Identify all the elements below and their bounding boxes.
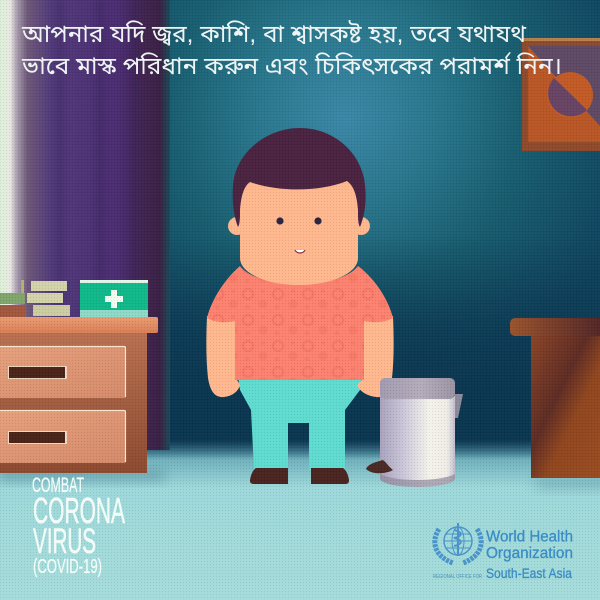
- WHO logo: [433, 523, 573, 581]
- pedal bin: [366, 378, 463, 487]
- Bengali message: আপনার যদি জ্বর, কাশি, বা শ্বাসকষ্ট হয়, তবে যথাযথ: [21, 20, 527, 48]
- bin body: [380, 396, 455, 487]
- WHO wordmark: REGIONAL OFFICE FOR: [433, 574, 482, 580]
- campaign title: [32, 474, 125, 578]
- campaign title: VIRUS: [33, 522, 96, 561]
- curtain and window light: [0, 0, 170, 450]
- legs and trousers: [238, 376, 362, 470]
- campaign title: (COVID-19): [33, 556, 102, 578]
- eyes: [276, 217, 322, 225]
- drawer 1: [0, 346, 126, 398]
- bin pedal: [366, 460, 393, 473]
- arms: [206, 316, 394, 397]
- mouth: [295, 250, 305, 253]
- character: [206, 128, 394, 484]
- shoes: [250, 468, 349, 484]
- bin lid: [380, 378, 455, 399]
- WHO emblem: [435, 523, 481, 563]
- WHO wordmark: World Health: [486, 528, 573, 546]
- Bengali message: ভাবে মাস্ক পরিধান করুন এবং চিকিৎসকের পরামর্শ নিন।: [21, 51, 562, 80]
- Bengali message: [21, 20, 562, 80]
- hair: [233, 128, 366, 227]
- shirt: [207, 266, 393, 380]
- bin base shadow: [380, 474, 455, 487]
- WHO wordmark: Organization: [486, 545, 573, 562]
- books: [0, 280, 70, 317]
- campaign title: CORONA: [33, 490, 125, 531]
- first aid kit: [80, 280, 148, 317]
- desk top: [0, 317, 158, 333]
- drawer 2: [0, 410, 126, 463]
- face: [240, 172, 358, 285]
- ears: [228, 217, 370, 235]
- right desk: [510, 318, 600, 478]
- campaign title: COMBAT: [32, 474, 84, 497]
- wall picture frame: [522, 38, 600, 151]
- WHO wordmark: [433, 528, 573, 581]
- WHO wordmark: South-East Asia: [486, 565, 572, 581]
- left desk: [0, 280, 158, 473]
- floor: [0, 440, 600, 600]
- bin handle: [455, 394, 463, 418]
- desk body: [0, 333, 147, 473]
